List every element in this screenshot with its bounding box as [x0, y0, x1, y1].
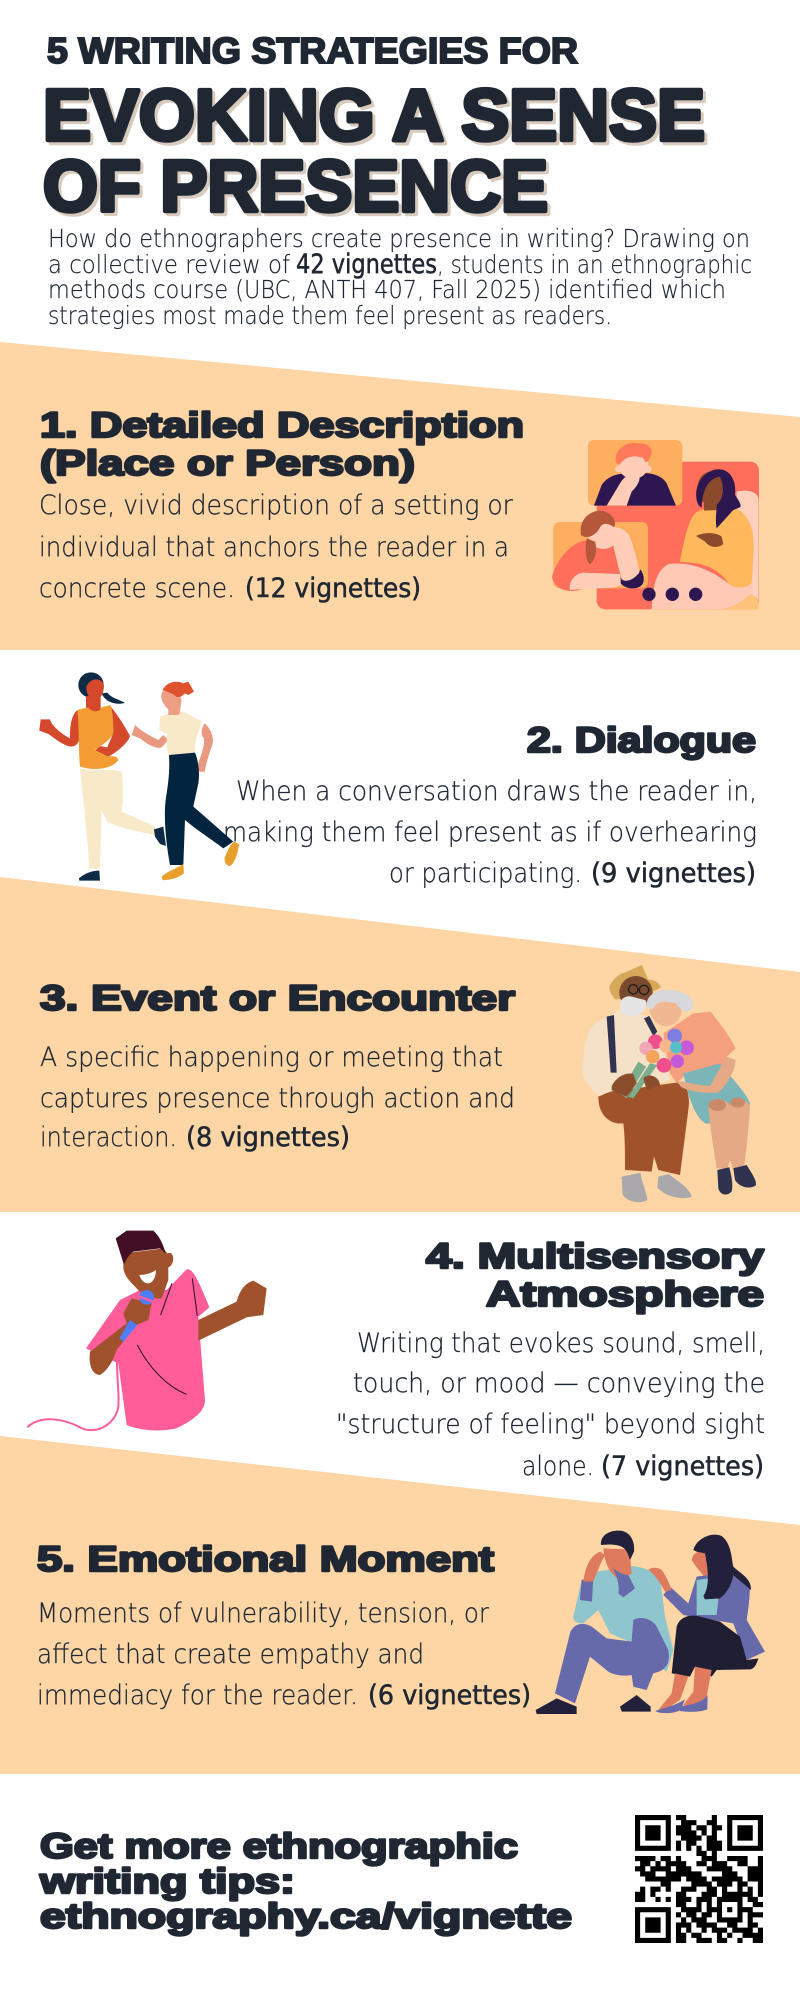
intro text — [48, 224, 752, 330]
title: EVOKING A SENSE — [43, 76, 705, 156]
section 4: body text: Writing that evokes sound, smell, — [357, 1328, 765, 1359]
section 1: heading: (Place or Person) — [40, 444, 415, 483]
section 5: body text: (6 vignettes) — [368, 1680, 531, 1711]
section 4: body text: touch, or mood — conveying the — [353, 1368, 765, 1399]
section 5: body text: Moments of vulnerability, tension, or — [37, 1598, 490, 1629]
section 4: heading — [426, 1237, 765, 1314]
section 3: body text — [40, 1042, 515, 1153]
section 4: body text: "structure of feeling" beyond sight — [336, 1409, 765, 1440]
section 1: body text — [39, 490, 514, 604]
QR code — [635, 1818, 763, 1940]
section 2: body text: (9 vignettes) — [591, 858, 756, 889]
title — [43, 76, 705, 227]
panel: band 5 background — [0, 1436, 800, 1774]
section 5: body text — [37, 1598, 531, 1711]
section 4: body text: (7 vignettes) — [601, 1451, 764, 1482]
section 2: body text: making them feel present as if overhearing — [223, 817, 757, 848]
section 1: heading — [40, 406, 524, 483]
section 3: body text: A specific happening or meeting that — [40, 1042, 503, 1073]
section 4: heading: 4. Multisensory — [426, 1237, 765, 1276]
section 5: body text: immediacy for the reader. — [37, 1680, 358, 1711]
section 1: body text: individual that anchors the reader in a — [39, 532, 509, 563]
intro text: , students in an ethnographic — [437, 250, 752, 279]
section 2: body text: When a conversation draws the reader in, — [236, 776, 757, 807]
section 3: body text: (8 vignettes) — [186, 1122, 350, 1153]
section 1: heading: 1. Detailed Description — [40, 406, 524, 445]
icon: comforting couple illustration — [536, 1531, 765, 1714]
intro text: a collective review of — [48, 250, 290, 279]
footer call to action: writing tips: — [39, 1862, 295, 1901]
intro text: strategies most made them feel present as readers. — [48, 301, 612, 330]
section 4: body text — [336, 1328, 765, 1482]
subtitle: 5 WRITING STRATEGIES FOR — [47, 30, 578, 71]
title: OF PRESENCE — [43, 147, 548, 227]
panel: band 1 background — [0, 342, 800, 650]
section 5: heading: 5. Emotional Moment — [37, 1540, 494, 1579]
section 2: body text: or participating. — [389, 858, 582, 889]
section 1: body text: (12 vignettes) — [245, 573, 421, 604]
section 5: body text: affect that create empathy and — [37, 1639, 424, 1670]
footer call to action — [39, 1827, 572, 1936]
icon: two people running illustration — [39, 672, 239, 881]
section 4: heading: Atmosphere — [486, 1275, 764, 1314]
section 2: heading: 2. Dialogue — [527, 721, 756, 760]
intro text: 42 vignettes — [296, 249, 437, 280]
footer call to action: ethnography.ca/vignette — [40, 1897, 572, 1936]
footer call to action: Get more ethnographic — [40, 1827, 518, 1866]
panel: band 3 background — [0, 877, 800, 1212]
section 1: body text: Close, vivid description of a setting or — [39, 490, 514, 521]
section 2: body text — [223, 776, 757, 889]
section 3: heading: 3. Event or Encounter — [40, 979, 515, 1018]
section 3: body text: interaction. — [40, 1122, 177, 1153]
intro text: methods course (UBC, ANTH 407, Fall 2025) identified which — [48, 275, 726, 304]
section 4: body text: alone. — [522, 1451, 594, 1482]
section 1: body text: concrete scene. — [39, 573, 235, 604]
section 3: body text: captures presence through action and — [40, 1083, 515, 1114]
icon: singer illustration — [27, 1231, 267, 1431]
icon: elderly couple illustration — [582, 965, 756, 1202]
icon: video call illustration — [552, 440, 759, 609]
